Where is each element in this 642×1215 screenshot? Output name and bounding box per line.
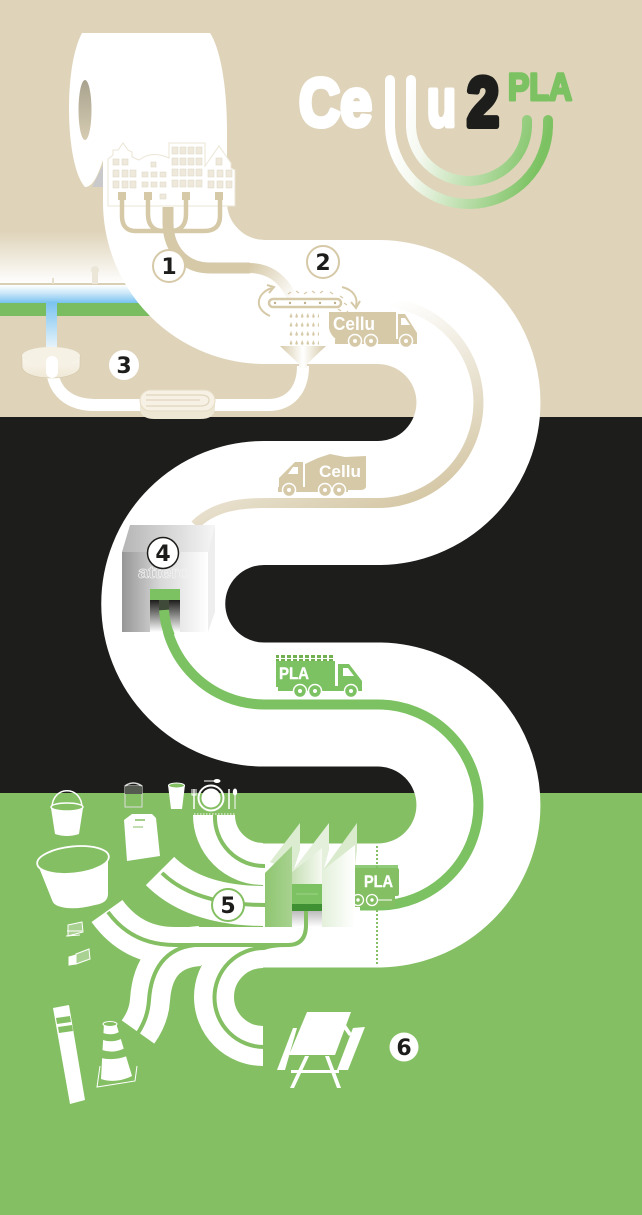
logo: Cellu2PLA: Ce [299, 65, 372, 141]
white serpentine road with toilet roll [69, 33, 478, 906]
icon: traffic cone [97, 1022, 137, 1087]
icon: small tray [66, 922, 83, 936]
step number 2: 2 [315, 251, 331, 276]
truck: PLA: PLA [279, 664, 309, 683]
toilet roll [69, 33, 227, 200]
icon: picnic table [277, 1012, 365, 1088]
dotted boundary line [376, 846, 378, 966]
step number 5 [212, 889, 244, 921]
logo: Cellu2PLA [299, 63, 572, 204]
truck: Cellu left-facing [278, 454, 366, 496]
attero ghost lettering: attero [138, 563, 190, 582]
background: beige top band [0, 0, 642, 417]
step number 3: 3 [116, 354, 132, 379]
truck: PLA entering factory [352, 865, 399, 907]
truck: PLA entering factory: PLA [364, 872, 393, 891]
step number 6: 6 [396, 1036, 412, 1061]
background: black middle band [0, 417, 642, 793]
house windows [113, 147, 232, 199]
logo: Cellu2PLA: PLA [508, 67, 572, 109]
green lines on branches [108, 815, 306, 1047]
house pipe connectors [118, 192, 223, 200]
water droplets [289, 312, 319, 346]
icon: road post [53, 1005, 85, 1104]
funnel [280, 346, 326, 368]
conveyor belt [259, 285, 360, 316]
step number 5: 5 [220, 894, 236, 919]
river landscape [0, 232, 160, 347]
settling disc [22, 347, 80, 378]
water return pipe [52, 366, 303, 405]
logo: Cellu2PLA: 2 [467, 63, 499, 141]
icon: large tub [36, 843, 110, 908]
icon: bag [124, 814, 160, 861]
houses [108, 143, 235, 206]
factory 5 [265, 823, 357, 927]
icon: cup [168, 783, 185, 809]
step number 1: 1 [161, 255, 177, 280]
step number 4: 4 [155, 542, 171, 567]
truck: Cellu right-facing: Cellu [333, 314, 375, 334]
pile of pressed material [140, 390, 215, 419]
icon: jar [125, 783, 142, 807]
icon: plate and cutlery [192, 779, 237, 814]
tan line from truck to attero [195, 302, 478, 525]
step number 1 [153, 250, 185, 282]
truck: PLA [276, 655, 362, 698]
green PLA line [164, 600, 478, 906]
logo arcs forming ll [390, 80, 548, 204]
icon: bucket [51, 791, 83, 836]
icon: small electronics [69, 949, 90, 965]
truck: Cellu right-facing [329, 312, 417, 348]
background: green bottom band [0, 793, 642, 1215]
road branches in green section [107, 815, 300, 1046]
logo: Cellu2PLA: u [427, 65, 456, 141]
step number 3 [109, 350, 139, 380]
pulp pipes from houses [122, 200, 292, 297]
attero plant building [122, 525, 215, 636]
step number 2 [307, 246, 339, 278]
truck: Cellu left-facing: Cellu [319, 462, 361, 481]
step number 6 [390, 1032, 418, 1062]
step number 4 [148, 538, 178, 568]
